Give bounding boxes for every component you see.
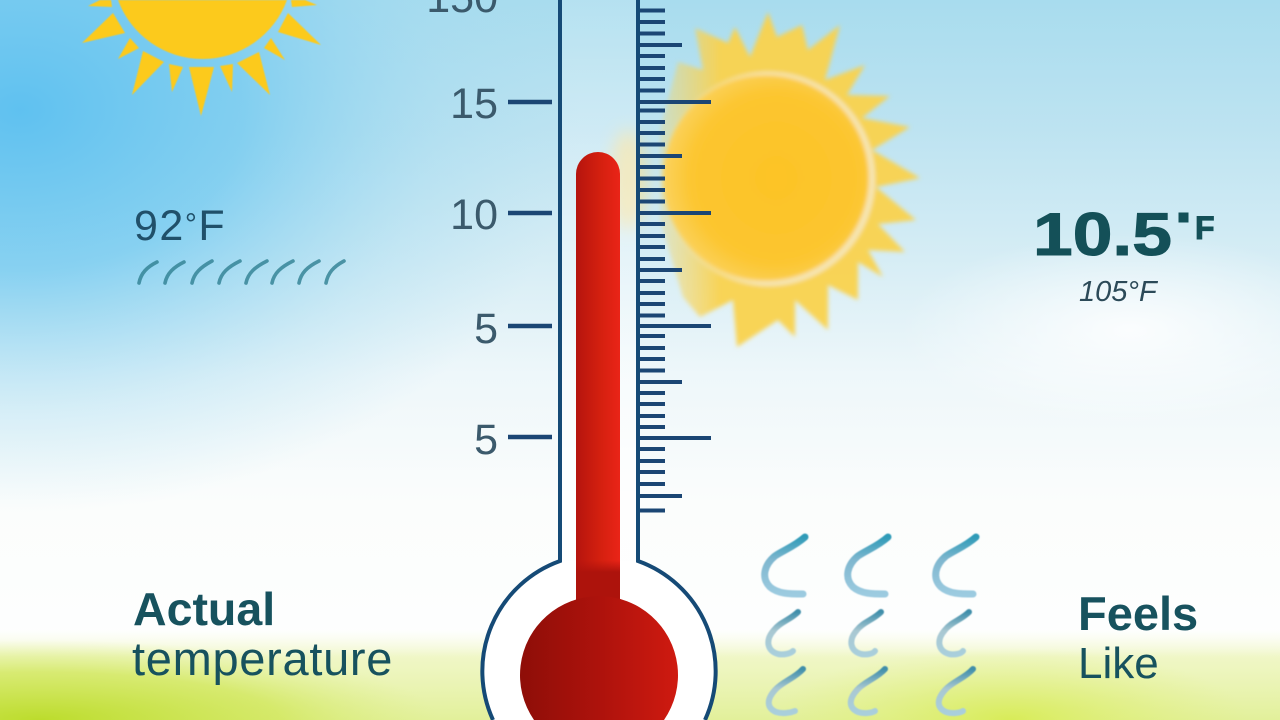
heading: feels like: Like	[1078, 639, 1159, 688]
actual temperature value: F	[198, 202, 226, 250]
thermometer bulb interior	[482, 561, 716, 720]
heading: feels like: Feels	[1078, 587, 1198, 640]
left scale ticks	[508, 102, 552, 437]
red mercury column	[576, 152, 620, 640]
icon: large sun behind thermometer	[610, 12, 920, 347]
actual temperature value: 92	[134, 202, 185, 250]
actual secondary value: 105°F	[1079, 276, 1159, 308]
left scale numbers	[426, 0, 498, 464]
right scale ticks	[640, 10, 711, 510]
left scale numbers: 10	[450, 191, 498, 239]
left scale numbers: 5	[474, 305, 498, 353]
icon: heat wisps	[765, 537, 976, 713]
heading: feels like	[1078, 587, 1198, 688]
icon: small sun top left	[82, 0, 321, 116]
heading: actual temperature	[132, 583, 393, 685]
heading: actual temperature: temperature	[132, 632, 393, 685]
thermometer glass interior	[560, 0, 638, 561]
left scale numbers: 15	[450, 80, 498, 128]
heading: actual temperature: Actual	[133, 583, 275, 635]
actual temperature value: °	[185, 208, 198, 241]
red mercury bulb	[520, 596, 678, 720]
thermometer	[482, 0, 716, 720]
feels-like value: 10.5	[1033, 200, 1172, 268]
left scale numbers: 5	[474, 416, 498, 464]
icon: humidity ripples	[139, 261, 344, 283]
feels-like value: F	[1195, 210, 1215, 246]
thermometer outline	[482, 0, 716, 720]
